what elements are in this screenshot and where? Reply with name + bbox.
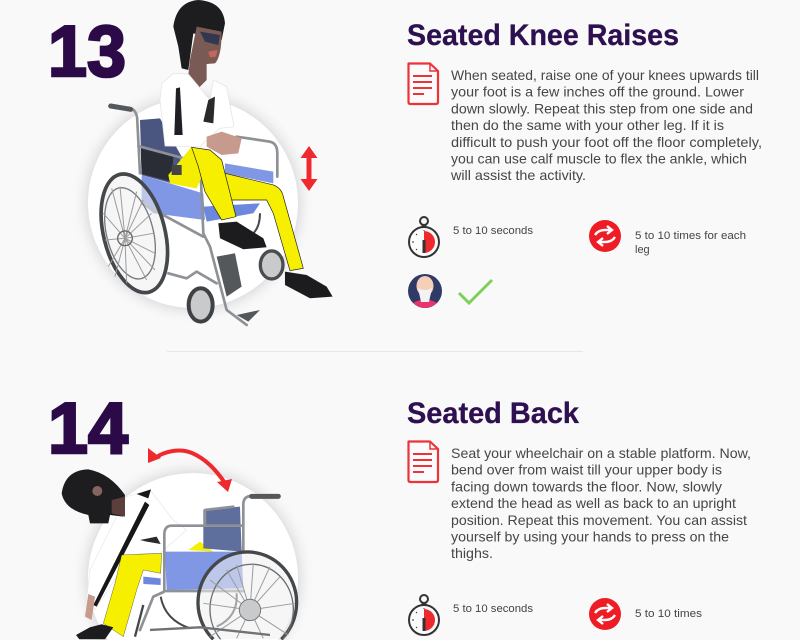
illustration: woman raising knee in wheelchair — [71, 0, 333, 325]
frame — [130, 108, 277, 325]
repetitions label: 5 to 10 times for each — [635, 230, 746, 242]
pants — [103, 553, 162, 637]
description text: then do the same with your other leg. If it is — [451, 117, 724, 133]
icon: document — [408, 64, 438, 104]
far pants leg — [225, 173, 303, 271]
hair and head — [62, 469, 125, 523]
description text: your foot is a few inches off the ground. Lower — [451, 84, 744, 100]
icon: elderly person avatar — [408, 274, 442, 308]
seat and back — [203, 507, 242, 552]
repetitions label: 5 to 10 times — [635, 608, 703, 620]
description text: Seat your wheelchair on a stable platform. Now, — [451, 445, 751, 461]
description text: yourself by using your hands to press on the — [451, 528, 729, 544]
description text: bend over from waist till your upper body is — [451, 462, 722, 478]
description text: extend the head as well as back to an upright — [451, 495, 736, 511]
divider — [167, 351, 583, 352]
repetitions label: leg — [635, 244, 650, 256]
icon: repeat — [589, 220, 621, 252]
duration label: 5 to 10 seconds — [453, 603, 534, 615]
description text: position. Repeat this movement. You can assist — [451, 512, 747, 528]
face and neck — [188, 27, 222, 90]
jacket — [87, 490, 187, 610]
hair back — [173, 0, 225, 70]
shoes — [76, 624, 113, 639]
jacket — [160, 73, 234, 147]
illustration: woman bending forward in wheelchair — [62, 456, 315, 640]
icon: stopwatch — [409, 595, 439, 635]
section: exercise 13 — [48, 0, 766, 325]
icon: document — [408, 442, 438, 482]
rear wheel — [90, 167, 179, 300]
description text: thighs. — [451, 545, 493, 561]
description text: you can use calf muscle to flex the ankle, which — [451, 150, 747, 166]
description text: down slowly. Repeat this step from one side and — [451, 100, 753, 116]
description text: When seated, raise one of your knees upwards till — [451, 67, 759, 83]
shoes — [218, 222, 267, 249]
arrow: up and down — [300, 146, 318, 191]
section: exercise 14 — [48, 389, 755, 640]
seat and back — [140, 118, 182, 183]
hand — [207, 132, 242, 155]
heading: Seated Knee Raises — [407, 19, 679, 52]
description text: facing down towards the floor. Now, slowly — [451, 478, 722, 494]
rear wheel — [198, 552, 297, 639]
description text: difficult to push your foot off the floor completely, — [451, 134, 762, 150]
heading: Seated Back — [407, 397, 579, 430]
arrow: curved bend motion — [148, 448, 232, 492]
icon: check mark — [459, 280, 492, 303]
icon: stopwatch — [409, 217, 439, 257]
far leg and hip — [168, 147, 203, 188]
number 13: 13 — [48, 12, 126, 92]
frame — [140, 496, 252, 630]
icon: repeat — [589, 598, 621, 630]
number 14: 14 — [48, 389, 128, 469]
casters — [189, 288, 213, 322]
hand — [85, 594, 95, 620]
duration label: 5 to 10 seconds — [453, 225, 534, 237]
near pants leg — [192, 147, 236, 220]
description text: will assist the activity. — [450, 167, 586, 183]
far wheel — [161, 593, 237, 628]
